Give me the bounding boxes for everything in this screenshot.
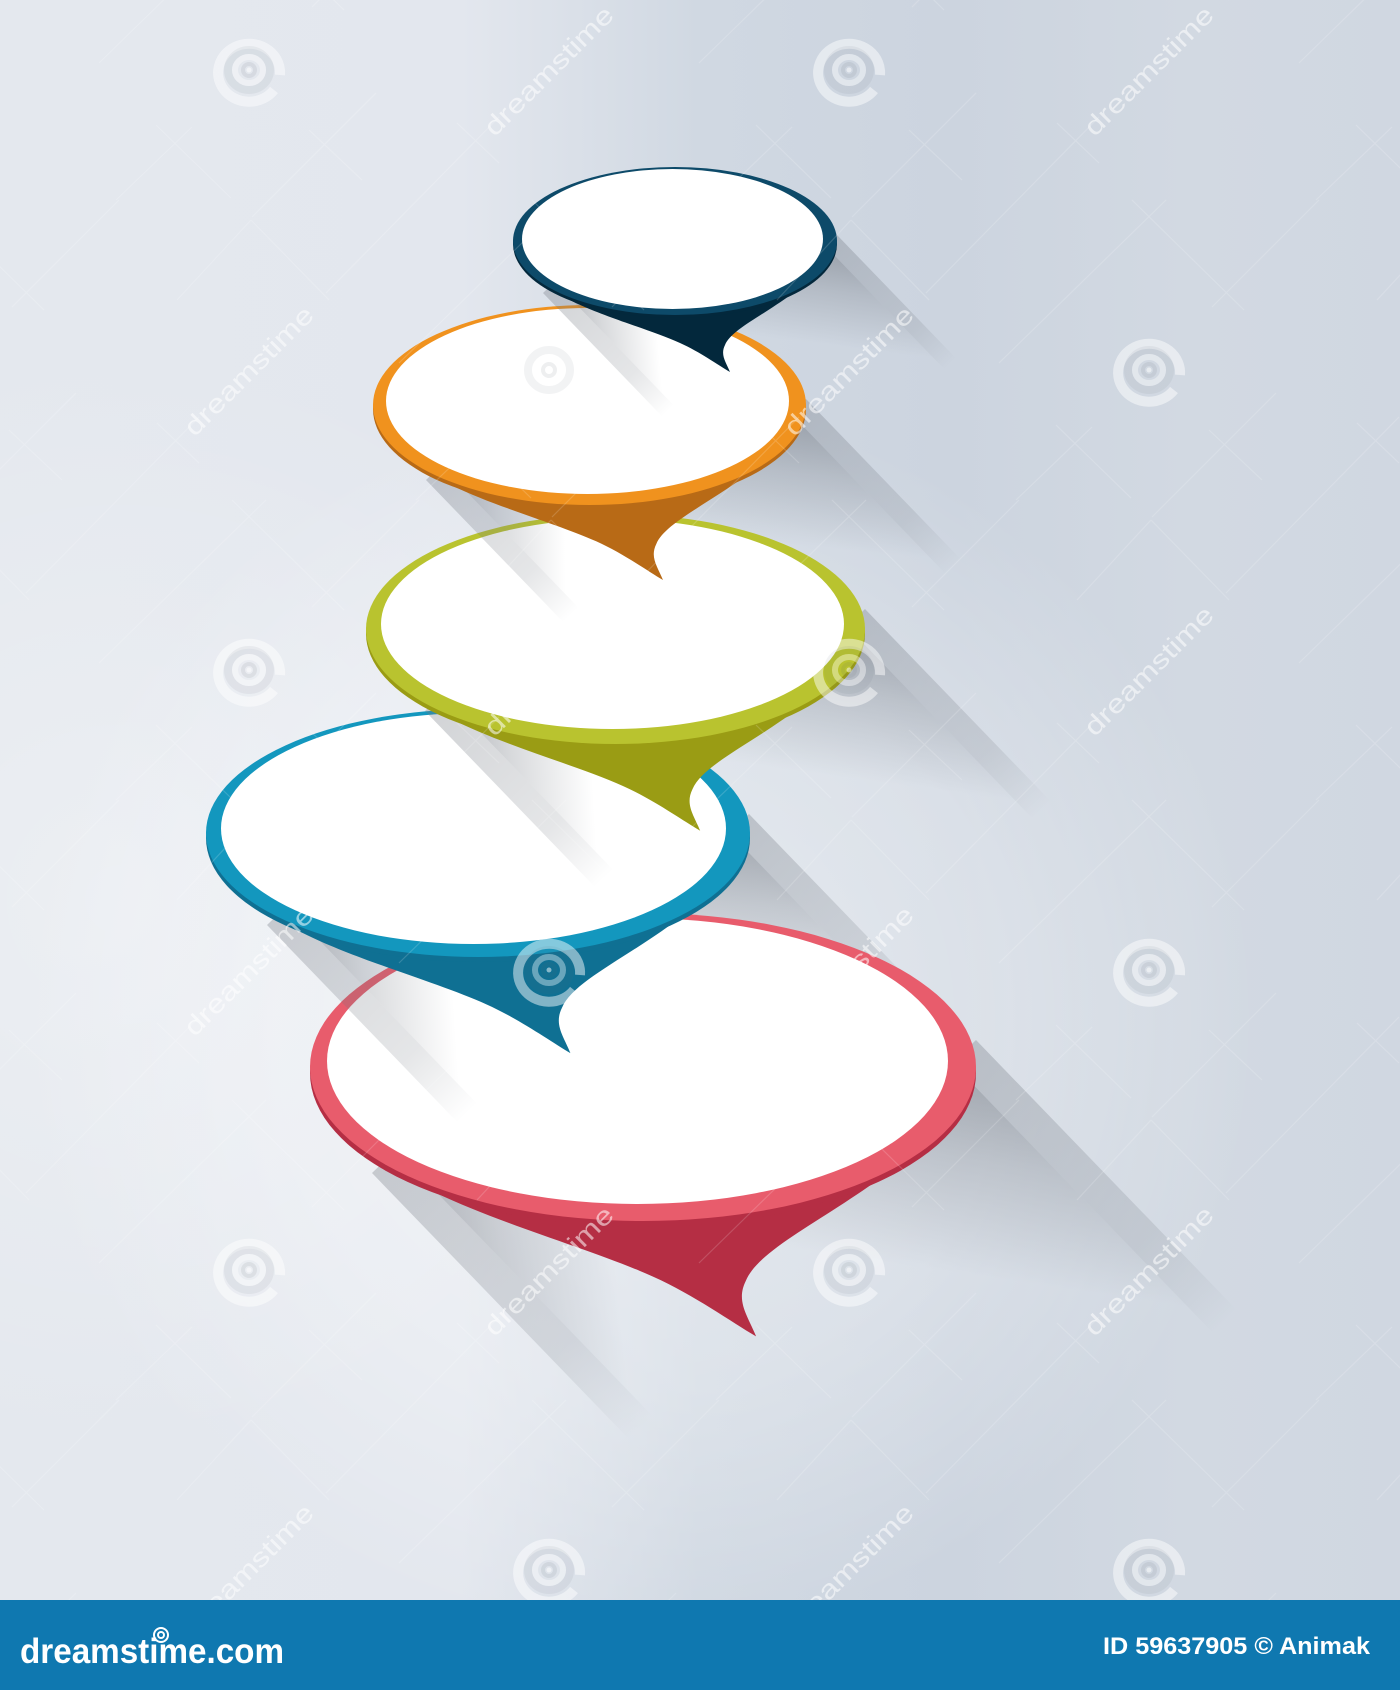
bubble: orange [373,305,806,580]
watermark text: dreamstime [1078,0,1220,142]
footer logo text: dreamstime.com [20,1632,284,1671]
watermark text: dreamstime [178,900,320,1042]
watermark text: dreamstime [478,600,620,742]
shadow: blue bubble right [579,814,930,1166]
bubble: red [310,913,976,1336]
bubble: navy top [513,167,837,372]
footer bar [0,1600,1400,1690]
shadow: green bubble right [710,609,1051,951]
watermark text: dreamstime [178,300,320,442]
shadow: orange bubble, left side on green bubble [426,347,701,622]
shadow: top bubble, left side on orange bubble [543,195,764,417]
shadow: orange bubble right [669,399,961,692]
watermark text: dreamstime [1078,1200,1220,1342]
shadow: green bubble, left side on blue bubble [425,562,750,887]
shadow: red bubble left [372,969,840,1439]
watermark text [178,0,1220,1640]
long shadows on background [372,235,1236,1513]
watermark text: dreamstime [778,1498,920,1640]
shadow: blue bubble, left side on red bubble [267,760,629,1123]
bubble: blue [206,709,750,1053]
watermark text: dreamstime [778,900,920,1042]
watermark text: dreamstime [1078,600,1220,742]
shadow: top bubble right [736,235,956,457]
bubble: green [366,514,865,831]
footer logo spiral [154,1628,168,1642]
watermark text: dreamstime [478,1200,620,1342]
footer image id credit: ID 59637905 © Animak [1103,1633,1371,1660]
watermark text: dreamstime [178,1498,320,1640]
watermark text: dreamstime [478,0,620,142]
watermark text: dreamstime [778,300,920,442]
shadow: red bubble right [765,1040,1236,1513]
